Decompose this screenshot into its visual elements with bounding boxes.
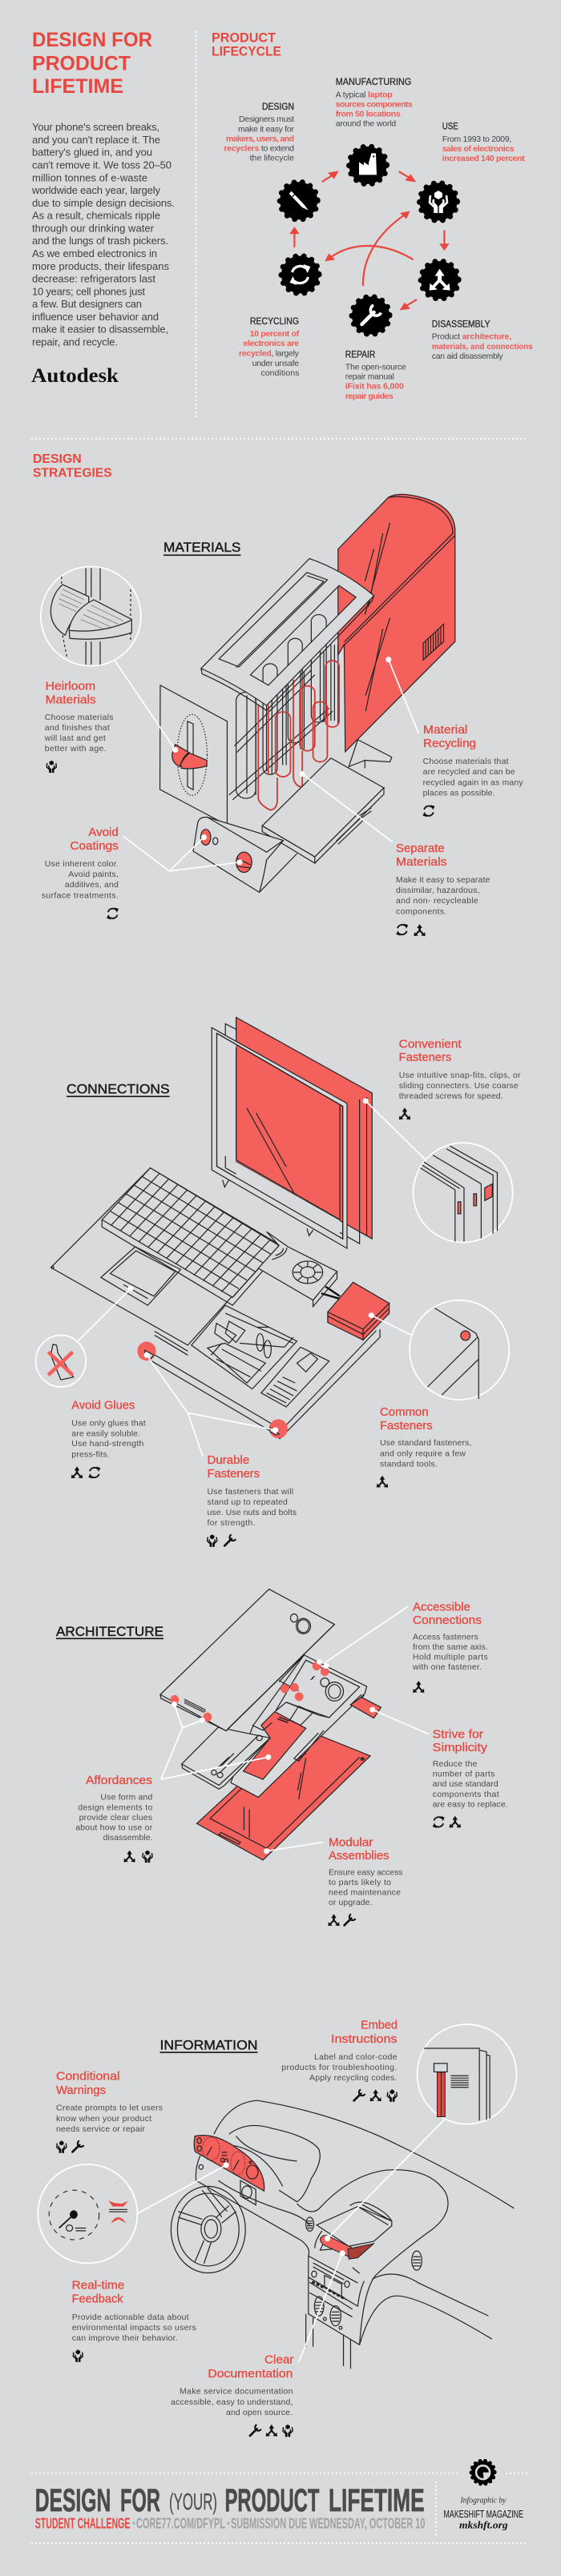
footer challenge line [35,2516,425,2532]
toaster red shell [338,494,455,752]
text: recycling: electronics are [244,339,299,348]
label: avoid coatings: additives, and [65,880,119,890]
red heating coils [258,680,302,810]
heading: design strategies: DESIGN [33,452,82,466]
Autodesk logo: Autodesk [31,365,119,387]
label: common fasteners: Fasteners [380,1420,433,1433]
intro paragraph: and the lungs of trash pickers. [32,235,168,247]
callout circle: lever detail [41,566,141,666]
text: design: the lifecycle [250,154,294,163]
label: separate materials: Separate [396,842,445,855]
footer headline [35,2483,425,2518]
label: avoid coatings [42,826,119,919]
steering wheel [171,2186,245,2273]
icon: makeshift logo [471,2461,494,2484]
text: repair [345,350,406,401]
text: repair: The open-source [345,362,406,372]
label: strive for simplicity: and use standard [433,1779,498,1789]
text: use: sales of electronics [442,144,515,154]
label: durable fasteners: Durable [207,1454,249,1467]
label: accessible connections: from the same axis. [413,1642,488,1652]
label: convenient fasteners: sliding connecters. Use coarse [399,1081,519,1091]
credit: makeshift magazine: MAKESHIFT MAGAZINE [444,2508,523,2520]
label: heirloom materials [44,680,113,773]
text: use [442,122,525,163]
heading: product lifecycle: PRODUCT [212,30,276,45]
label: accessible connections: Hold multiple parts [413,1653,488,1662]
panel: information [38,2019,517,2437]
label: affordances: Affordances [86,1774,152,1787]
label: common fasteners: and only require a few [380,1449,466,1459]
footer challenge line: STUDENT CHALLENGE [35,2516,130,2532]
air vents [306,2217,313,2231]
callout circle: convenient fasteners detail [414,1143,513,1243]
LCD red panel [236,1018,372,1239]
label: separate materials: dissimilar, hazardous, [396,886,479,895]
label: heirloom materials: Materials [46,693,96,706]
red battery [244,1712,306,1779]
label: affordances: provide clear clues [79,1813,152,1822]
text: use: increased 140 percent [442,154,525,163]
footer challenge line: · [226,2516,231,2532]
knobs [200,830,211,845]
label: real-time feedback: can improve their behavior. [72,2333,178,2343]
label: common fasteners [377,1406,471,1488]
intro paragraph: 10 years; cell phones just [32,285,145,297]
intro paragraph: influence user behavior and [32,311,159,323]
callout circle: common fasteners detail [410,1300,509,1400]
text: manufacturing: from 50 locations [336,109,401,119]
label: heirloom materials: and finishes that [45,723,110,733]
text: design: makers, users, and [226,134,294,143]
red manual [321,2236,351,2257]
footer headline: PRODUCT [224,2483,319,2518]
heading: design strategies [33,452,112,480]
label: conditional warnings: Create prompts to let users [56,2104,163,2113]
instrument cluster [194,2136,264,2191]
heading: architecture: ARCHITECTURE [56,1625,163,1639]
label: real-time feedback: Real-time [72,2279,124,2292]
callout circle: glue [36,1335,86,1387]
label: strive for simplicity: are easy to replace. [433,1799,508,1809]
text: repair: REPAIR [345,350,375,360]
label: avoid glues: Avoid Glues [71,1400,135,1413]
chassis rails [145,1329,380,1439]
text: repair: repair guides [345,392,394,401]
text: manufacturing: A typical laptop [336,90,393,99]
label: avoid coatings: Coatings [71,840,119,853]
callout circle: embedded instructions [418,2024,517,2124]
label: strive for simplicity: components that [433,1790,499,1799]
label: material recycling: places as possible. [423,788,495,798]
label: common fasteners: Common [380,1406,429,1419]
intro paragraph: more products, their lifespans [32,260,170,272]
label: separate materials: Make it easy to separate [396,875,490,885]
label: real-time feedback: Provide actionable data about [72,2313,189,2322]
label: modular assemblies: need maintenance [329,1888,401,1898]
front bezel [212,1027,347,1248]
label: accessible connections: Connections [413,1614,482,1627]
illustration: toaster [41,494,455,892]
label: clear documentation: Documentation [208,2368,293,2381]
label: real-time feedback [72,2279,196,2362]
credit: makeshift magazine: mkshft.org [459,2520,508,2531]
label: material recycling: Material [423,724,467,737]
base plate [50,1168,279,1345]
label: strive for simplicity: Reduce the [433,1759,478,1769]
back cover [160,1589,334,1731]
text: repair: iFixit has 6,000 [345,382,404,392]
label: conditional warnings: Warnings [56,2084,106,2097]
text: recycling: 10 percent of [250,329,300,339]
panel: materials [41,494,523,936]
text: disassembly: materials, and connections [432,342,533,352]
text: recycling: RECYCLING [250,317,299,327]
label: real-time feedback: Feedback [72,2293,123,2306]
toaster top plate [201,559,373,705]
intro paragraph: As we embed electronics in [32,247,157,259]
label: clear documentation: Clear [264,2354,294,2367]
panel: footer [32,2461,529,2543]
red tab [350,1697,381,1718]
intro paragraph: can't remove it. We toss 20–50 [32,159,172,171]
label: conditional warnings: needs service or repair [56,2124,146,2134]
label: accessible connections: Accessible [413,1601,470,1614]
divider: vertical dotted [196,32,197,419]
lever panel [160,685,227,826]
badge: repair [352,296,389,335]
red access points [170,1662,329,1722]
text: manufacturing: sources components [336,99,413,109]
title: LIFETIME [32,75,123,98]
text: manufacturing: MANUFACTURING [336,78,411,87]
base [193,817,284,892]
mid frame [231,1655,367,1797]
text: recycling: conditions [260,368,299,378]
intro paragraph: decrease: refrigerators last [32,272,155,285]
crumb tray [262,758,384,857]
text: disassembly [432,320,533,361]
label: modular assemblies [328,1837,402,1926]
intro paragraph: a few. But designers can [32,298,142,310]
title [32,29,152,98]
label: convenient fasteners: Fasteners [399,1051,451,1064]
label: modular assemblies: Modular [329,1837,373,1850]
callout circle: gauge feedback [38,2164,137,2263]
trackpad [101,1247,180,1305]
arrows: lifecycle [289,171,450,310]
red fastener highlights [137,1341,156,1360]
dashboard outlines [214,2100,514,2208]
label: accessible connections: with one fastener. [412,1662,482,1672]
glovebox tray [317,2202,392,2246]
label: durable fasteners [207,1454,297,1547]
battery coin [321,1678,329,1686]
badge: design [280,182,317,219]
label: material recycling: are recycled and can be [423,767,515,777]
panel: architecture [56,1589,508,1926]
divider: horizontal dotted [32,438,529,440]
footer headline: (YOUR) [169,2490,217,2515]
badge: recycling [281,256,319,293]
label: clear documentation [171,2354,294,2437]
label: affordances [75,1774,153,1863]
credit: makeshift magazine: Infographic by [460,2496,507,2505]
illustration: phone [160,1589,429,1860]
label: embed instructions: products for troubleshooting. [281,2063,397,2072]
leader lines [138,2119,446,2362]
label: strive for simplicity: Simplicity [433,1742,488,1754]
label: avoid glues [71,1400,146,1479]
title: DESIGN FOR [32,29,152,51]
heading: product lifecycle: LIFECYCLE [212,45,281,59]
text: design: recyclers to extend [224,144,294,154]
label: conditional warnings [56,2071,163,2153]
footer challenge line: CORE77.COM/DFYPL [136,2516,225,2532]
keyboard [102,1168,279,1297]
label: embed instructions [281,2019,398,2102]
label: convenient fasteners: Use intuitive snap-fits, clips, or [399,1071,521,1080]
heading: information: INFORMATION [160,2039,258,2053]
label: durable fasteners: use. Use nuts and bolts [207,1508,297,1517]
text: recycling: under unsafe [252,359,299,368]
label: embed instructions: Label and color-code [314,2052,398,2062]
intro paragraph: through our drinking water [32,222,155,234]
heading: design strategies: STRATEGIES [33,467,112,480]
label: separate materials: components. [396,907,446,917]
second board [261,1347,329,1407]
panel: connections [36,1018,521,1547]
label: avoid glues: press-fits. [71,1450,110,1460]
text: recycling [239,317,300,378]
text: use: From 1993 to 2009, [442,135,511,144]
label: material recycling: Choose materials that [423,757,509,766]
label: affordances: Use form and [100,1793,153,1802]
label: heirloom materials: Choose materials [45,713,113,722]
label: heirloom materials: will last and get [44,733,106,743]
leader lines [77,1101,426,1457]
label: common fasteners: standard tools. [380,1460,438,1469]
label: heirloom materials: Heirloom [46,680,95,693]
footer headline: LIFETIME [329,2483,425,2518]
red screen [197,1728,370,1860]
intro paragraph: and you can't replace it. The [32,134,160,146]
label: convenient fasteners: Convenient [399,1038,462,1051]
text: design: make it easy for [238,124,295,134]
badge: manufacturing [349,147,386,184]
text: design: DESIGN [262,102,294,112]
logic board [192,1305,297,1389]
small lower plate [182,1727,270,1789]
text: design: Designers must [239,115,294,124]
label: separate materials [396,842,490,936]
label: avoid glues: are easily soluble. [71,1429,140,1438]
label: conditional warnings: Conditional [56,2071,120,2084]
label: affordances: about how to use or [75,1823,153,1833]
credit: makeshift magazine [444,2496,523,2531]
lever red [172,745,207,769]
leader lines [161,1606,429,1851]
red drive box [328,1282,389,1329]
text: use: USE [442,122,458,131]
gauge pod [240,2180,256,2205]
intro paragraph: Your phone's screen breaks, [32,121,159,133]
intro paragraph: As a result, chemicals ripple [32,210,160,222]
panel: product lifecycle [212,30,533,401]
illustration: car dashboard [38,2024,517,2369]
label: durable fasteners: Use fasteners that will [207,1487,293,1497]
intro paragraph: worldwide each year, largely [31,184,160,196]
label: accessible connections [412,1601,488,1693]
label: modular assemblies: or upgrade. [329,1898,372,1907]
intro paragraph: battery's glued in, and you [32,147,152,159]
intro paragraph: due to simple design decisions. [32,197,175,209]
label: material recycling [422,724,523,817]
label: avoid glues: Use only glues that [71,1418,146,1428]
badge: disassembly [421,261,458,299]
intro paragraph: million tonnes of e-waste [32,171,147,183]
label: embed instructions: Apply recycling codes. [309,2073,397,2083]
black cables [321,1287,340,1299]
heading: product lifecycle [212,30,281,59]
intro paragraph: make it easier to disassemble, [32,324,168,336]
title: PRODUCT [32,53,131,75]
label: avoid coatings: Use inherent color. [45,859,119,869]
label: accessible connections: Access fasteners [413,1632,478,1642]
label: avoid coatings: Avoid paints, [68,870,119,879]
text: recycling: recycled, largely [239,349,300,359]
label: real-time feedback: environmental impacts so users [72,2323,196,2333]
footer headline: DESIGN [35,2483,111,2518]
panel: introduction [31,29,175,387]
label: material recycling: Recycling [423,737,476,750]
label: avoid coatings: surface treatments. [42,890,119,900]
text: disassembly: Product architecture, [432,332,511,341]
label: separate materials: and non- recycleable [396,896,478,906]
label: conditional warnings: know when your product [56,2114,151,2124]
label: clear documentation: accessible, easy to understand, [171,2397,293,2407]
label: common fasteners: Use standard fasteners, [380,1438,471,1448]
label: avoid coatings: Avoid [88,826,119,839]
intro paragraph [31,121,175,348]
label: modular assemblies: Ensure easy access [329,1867,402,1877]
footer challenge line: SUBMISSION DUE WEDNESDAY, OCTOBER 10 [231,2516,425,2532]
label: embed instructions: Instructions [331,2033,398,2046]
text: disassembly: DISASSEMBLY [432,320,490,330]
label: embed instructions: Embed [361,2019,398,2031]
label: heirloom materials: better with age. [45,744,107,754]
label: strive for simplicity: Strive for [433,1728,483,1741]
text: design [224,102,295,163]
text: manufacturing: around the world [336,119,396,128]
label: convenient fasteners: threaded screws for speed. [399,1091,503,1101]
label: durable fasteners: Fasteners [207,1468,260,1481]
intro paragraph: repair, and recycle. [32,336,118,348]
fan unit [258,1232,337,1300]
text: repair: repair manual [345,372,394,381]
badge: use [420,183,457,221]
center console [309,2231,364,2345]
label: affordances: design elements to [78,1802,152,1812]
text: manufacturing [336,78,413,128]
label: affordances: disassemble. [103,1833,153,1843]
label: modular assemblies: to parts likely to [329,1878,391,1887]
footer headline: FOR [120,2483,160,2518]
label: material recycling: recycled again in as many [423,778,523,787]
heading: materials: MATERIALS [163,541,240,555]
heating racks [229,645,338,800]
label: clear documentation: Make service documentation [180,2387,293,2397]
label: durable fasteners: stand up to repeated [207,1497,288,1507]
text: disassembly: can aid disassembly [432,352,504,361]
tray back [349,740,392,768]
label: durable fasteners: for strength. [207,1518,255,1528]
label: separate materials: Materials [396,856,446,869]
leader lines [115,660,418,871]
label: clear documentation: and open source. [226,2408,293,2417]
label: strive for simplicity: number of parts [433,1770,494,1779]
illustration: laptop [36,1018,513,1457]
label: modular assemblies: Assemblies [329,1850,389,1863]
heading: connections: CONNECTIONS [67,1083,170,1097]
footer challenge line: · [131,2516,136,2532]
label: convenient fasteners [399,1038,521,1119]
label: strive for simplicity [433,1728,508,1828]
label: avoid glues: Use hand-strength [71,1439,143,1449]
